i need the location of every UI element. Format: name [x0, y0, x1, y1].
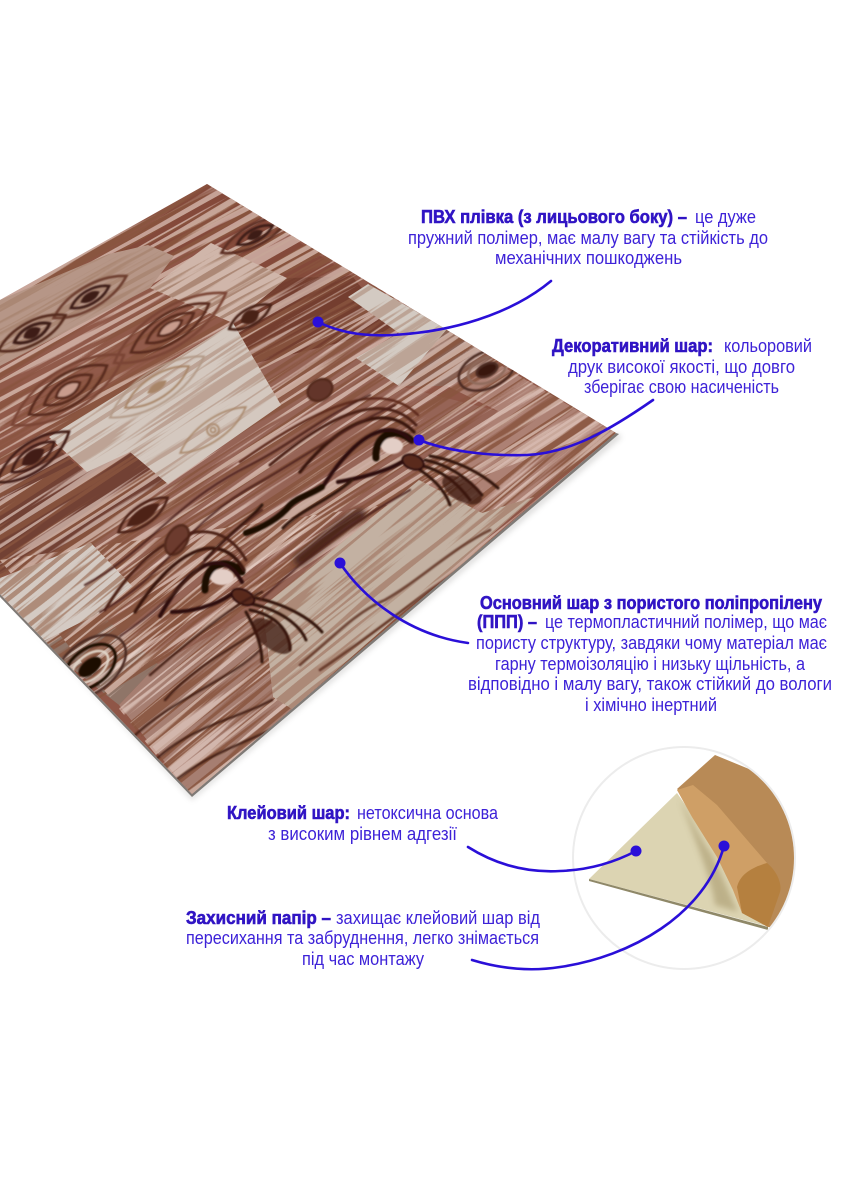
callout: base foam layer: гарну термоізоляцію і низьку щільність, а — [495, 653, 806, 674]
arrow: protective paper — [472, 840, 730, 969]
wood panel — [0, 184, 794, 926]
circle outline — [573, 747, 795, 969]
callout: base foam layer: Основний шар з пористого поліпропілену — [480, 593, 822, 613]
paper flap — [677, 785, 768, 927]
callout: protective paper: під час монтажу — [302, 948, 425, 969]
callout: protective paper: пересихання та забруднення, легко знімається — [186, 927, 539, 948]
big knot upper right — [240, 398, 498, 511]
callout: PVC film: ПВХ плівка (з лицьового боку) – — [421, 207, 687, 227]
callout: PVC film: механічних пошкоджень — [495, 247, 682, 268]
callout: base foam layer — [468, 593, 832, 715]
inset circle: back of panel — [573, 747, 800, 969]
fine grain on light planks — [0, 247, 533, 709]
arrow: base foam layer — [334, 558, 468, 643]
callout: adhesive layer — [227, 802, 499, 844]
panel edge and shadow — [0, 433, 622, 800]
callout: decorative layer: кольоровий — [724, 335, 812, 356]
arrow: adhesive layer — [468, 846, 642, 871]
callout: PVC film: пружний полімер, має малу вагу та стійкість до — [408, 227, 768, 248]
callout: adhesive layer: з високим рівнем адгезії — [268, 823, 457, 844]
callout: protective paper — [186, 907, 540, 969]
callout: PVC film: це дуже — [695, 206, 756, 227]
callout: protective paper: захищає клейовий шар від — [336, 907, 540, 928]
callout: adhesive layer: нетоксична основа — [357, 802, 499, 823]
big knot lower left — [105, 532, 322, 662]
callout: adhesive layer: Клейовий шар: — [227, 803, 350, 823]
dark crack and blotches — [246, 487, 322, 533]
plank surface — [0, 184, 794, 926]
callout: decorative layer: зберігає свою насиченість — [584, 376, 779, 397]
callout: protective paper: Захисний папір – — [186, 908, 331, 928]
wood knots — [0, 208, 522, 785]
peeled paper sample — [589, 755, 800, 930]
arrow: PVC film — [312, 281, 551, 335]
callout: base foam layer: (ППП) – — [477, 612, 537, 632]
callout: decorative layer: друк високої якості, що довго — [568, 356, 795, 377]
callout: decorative layer — [552, 335, 812, 397]
arrow: decorative layer — [414, 400, 653, 455]
callout: base foam layer: і хімічно інертний — [585, 694, 717, 715]
callout: decorative layer: Декоративний шар: — [552, 336, 713, 356]
callout: PVC film — [408, 206, 768, 268]
wood grain — [0, 184, 398, 500]
light planks — [0, 243, 534, 709]
